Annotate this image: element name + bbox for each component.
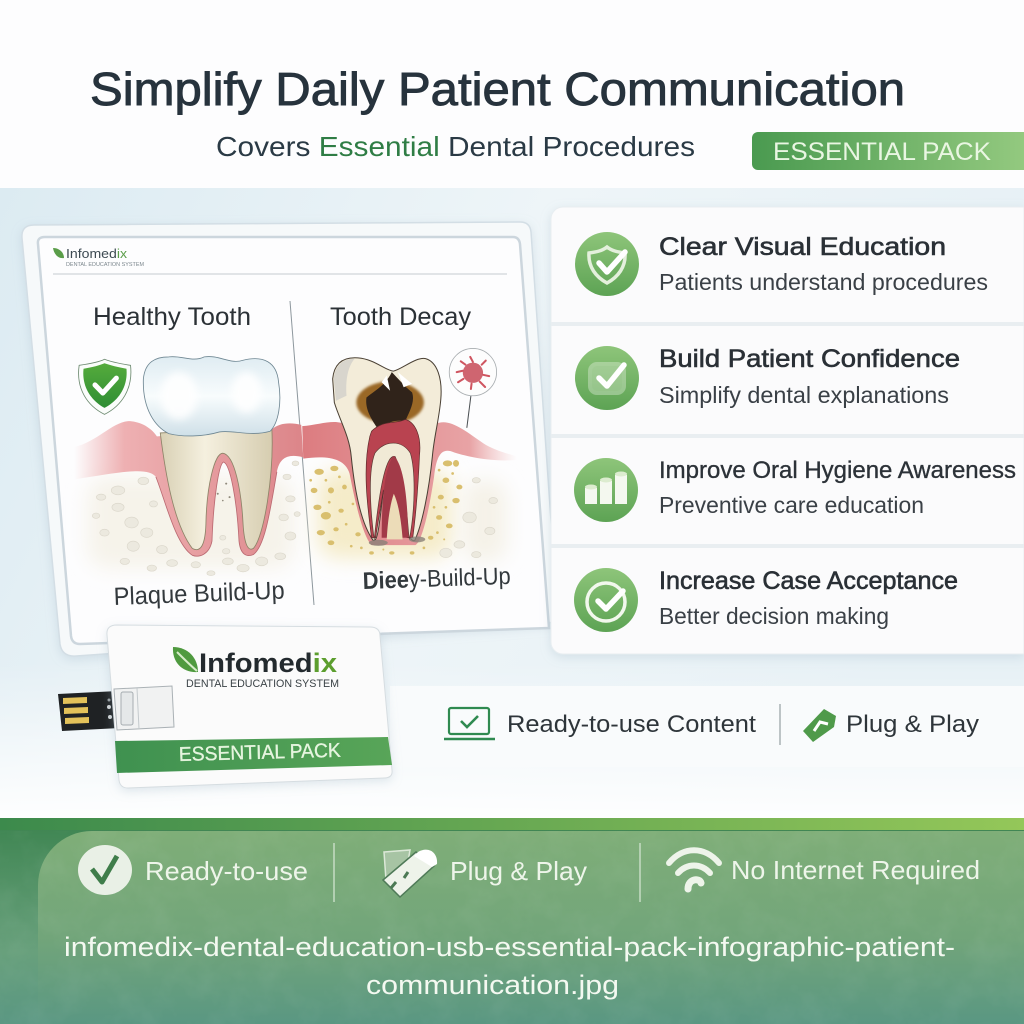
badge: essential pack [752, 132, 1024, 170]
label: plug and play: Plug & Play [450, 856, 587, 886]
filename caption: communication.jpg [366, 970, 619, 1000]
icon: bars [574, 458, 638, 522]
filename caption: infomedix-dental-education-usb-essential-pack-infographic-patient- [64, 932, 955, 962]
root [160, 428, 272, 550]
heading: Improve Oral Hygiene Awareness [659, 457, 1016, 484]
usb slider [114, 686, 174, 730]
heading: Increase Case Acceptance [659, 567, 958, 595]
card logo: Infomed ix [199, 648, 337, 678]
description: Better decision making [659, 603, 889, 629]
benefit: build patient confidence [575, 345, 960, 410]
description: Simplify dental explanations [659, 382, 949, 408]
icon: laptop [444, 708, 495, 739]
illustration: healthy tooth [74, 357, 303, 576]
benefit: increase case acceptance [574, 567, 958, 632]
icon: green shield with check [79, 359, 131, 414]
heading: Build Patient Confidence [659, 345, 960, 373]
benefit: clear visual education [575, 232, 988, 296]
label: no internet required: No Internet Required [731, 855, 980, 885]
description: Preventive care education [659, 492, 924, 518]
icon: leaf [173, 647, 198, 672]
main background [0, 188, 1024, 820]
icon: bacteria callout [449, 348, 497, 428]
subtitle: Covers Essential Dental Procedures [216, 131, 695, 162]
footer band [0, 818, 1024, 1024]
tablet logo [53, 246, 144, 268]
label: ready-to-use: Ready-to-use [145, 856, 308, 886]
tablet logo: DENTAL EDUCATION SYSTEM [66, 262, 144, 268]
usb card [58, 625, 392, 788]
heading: Clear Visual Education [659, 233, 946, 261]
green strip [115, 737, 392, 773]
icon: circle check [574, 568, 638, 632]
card tagline: DENTAL EDUCATION SYSTEM [186, 678, 339, 690]
description: Patients understand procedures [659, 269, 988, 295]
decay [356, 382, 424, 423]
heading: healthy tooth: Healthy Tooth [93, 303, 251, 331]
benefit: improve oral hygiene awareness [574, 457, 1016, 522]
header background [0, 0, 1024, 190]
title: Simplify Daily Patient Communication [90, 63, 905, 115]
icon: badge check [575, 346, 639, 410]
gum [74, 421, 303, 556]
tablet logo: Infomed ix [66, 246, 128, 261]
icon: plug tag [803, 709, 836, 742]
feature bar [390, 686, 1024, 767]
icon: shield check [575, 232, 639, 296]
panel: tablet with tooth comparison [22, 222, 558, 656]
heading: tooth decay: Tooth Decay [330, 303, 472, 331]
illustration: decayed tooth [302, 358, 517, 561]
panel: benefits list [551, 207, 1024, 654]
icon: check circle [78, 845, 132, 895]
caption: plaque build-up: Plaque Build-Up [113, 576, 285, 611]
label: plug and play: Plug & Play [846, 711, 979, 738]
gum [302, 422, 517, 545]
pulp [366, 419, 420, 538]
filename caption [64, 932, 955, 1000]
icon: usb drive [383, 850, 437, 897]
icon: wifi [669, 850, 719, 889]
card label: essential pack: ESSENTIAL PACK [179, 740, 342, 766]
crown [143, 357, 280, 436]
usb connector [58, 691, 120, 731]
caption: decay build-up: Dieey-Build-Up [362, 563, 511, 595]
badge: essential pack: ESSENTIAL PACK [773, 138, 991, 166]
label: ready-to-use content: Ready-to-use Content [507, 711, 756, 738]
tooth body [333, 358, 441, 541]
